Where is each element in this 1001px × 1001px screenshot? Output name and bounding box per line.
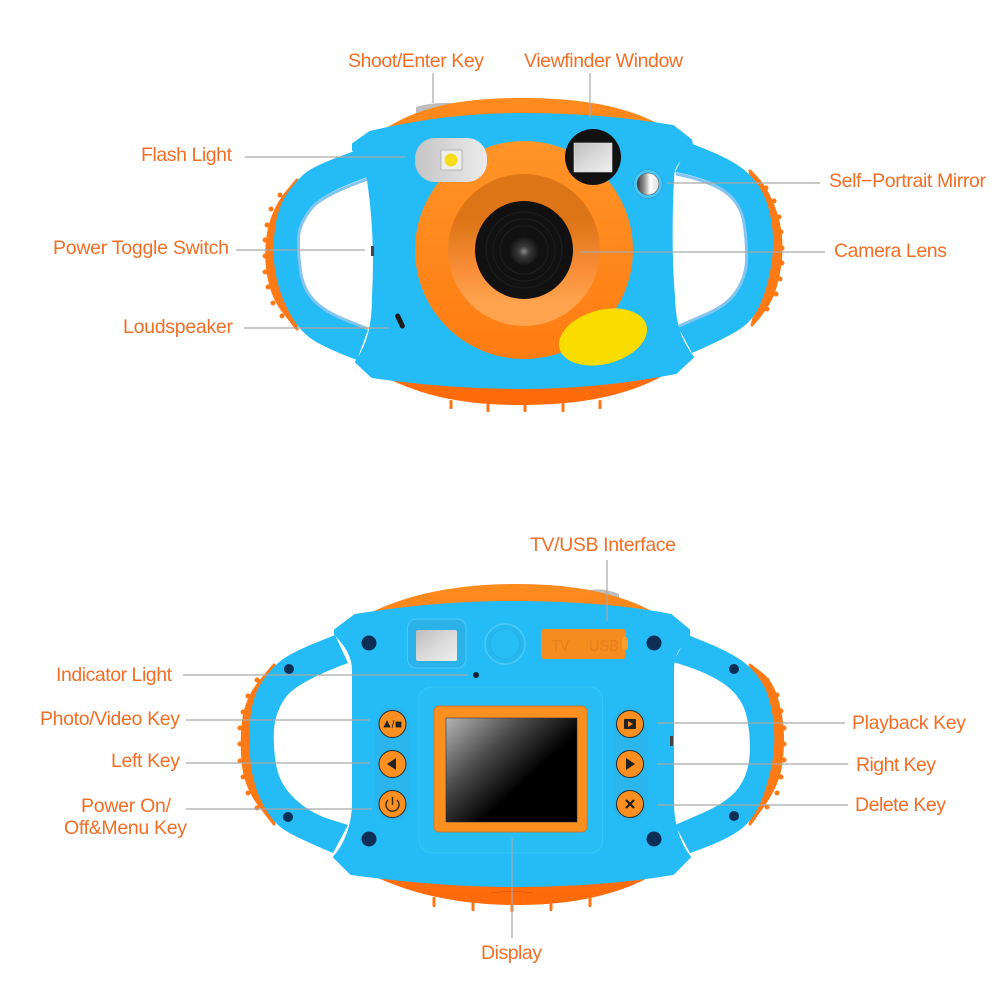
label: Self-Portrait Mirror: Self−Portrait Mirror: [829, 170, 986, 192]
label: TV/USB Interface: TV/USB Interface: [530, 534, 676, 556]
left handle orange grip: [262, 180, 297, 329]
label: Viewfinder Window: Viewfinder Window: [524, 50, 684, 72]
label: Delete Key: Delete Key: [855, 794, 946, 816]
right handle inner shading: [676, 174, 747, 326]
left handle: [274, 150, 368, 360]
label: Power On/Off & Menu Key: Power On/: [81, 795, 172, 817]
camera lens: [475, 201, 573, 299]
button recess left: [375, 707, 410, 821]
back viewfinder: [408, 619, 466, 668]
playback key: [616, 710, 644, 738]
main orange circle: [415, 141, 633, 359]
camera front view: [262, 98, 784, 412]
left handle back: [249, 635, 348, 853]
left key: [379, 750, 406, 778]
label: Power Toggle Switch: Power Toggle Switch: [53, 237, 229, 259]
flash light: [415, 138, 487, 182]
right handle orange grip: [750, 171, 784, 325]
shutter button back: [583, 589, 619, 604]
TV USB port cover: [541, 629, 628, 659]
display screen: [446, 718, 577, 822]
label: Playback Key: Playback Key: [852, 712, 966, 734]
viewfinder window: [565, 129, 621, 185]
left key group: [375, 707, 410, 821]
bottom seam mark: [491, 892, 533, 893]
orange shell back: [362, 584, 662, 912]
label: Photo/Video Key: Photo/Video Key: [40, 708, 180, 730]
label: Camera Lens: Camera Lens: [834, 240, 947, 262]
label: Flash Light: Flash Light: [141, 144, 233, 166]
right handle back: [673, 635, 774, 853]
power key: [379, 790, 406, 818]
yellow grip pad: [553, 299, 653, 375]
label: Left Key: Left Key: [111, 750, 180, 772]
right handle: [675, 143, 773, 353]
label: Loudspeaker: Loudspeaker: [123, 316, 234, 338]
label: Power On/Off & Menu Key: [64, 795, 187, 839]
photo video key: [379, 710, 406, 738]
right grip back: [750, 665, 786, 824]
side switch back: [670, 736, 673, 746]
loudspeaker slot: [394, 313, 406, 329]
orange shell: [380, 98, 670, 412]
right key group: [613, 707, 648, 821]
indicator light: [473, 672, 479, 678]
blue body back: [334, 602, 690, 886]
power toggle switch: [371, 246, 374, 256]
label: Right Key: Right Key: [856, 754, 936, 776]
shutter button top: [416, 103, 453, 118]
round button recess: [485, 624, 525, 664]
button recess right: [613, 707, 648, 821]
camera back view: [238, 584, 786, 912]
self portrait mirror: [634, 170, 662, 198]
leader lines: [183, 73, 848, 938]
blue body: [353, 114, 693, 388]
display frame: [434, 706, 587, 832]
display surround panel: [419, 687, 602, 853]
left handle inner shading: [298, 179, 368, 329]
label: Display: Display: [481, 942, 542, 964]
label: Indicator Light: Indicator Light: [56, 664, 173, 686]
label: Power On/Off & Menu Key: Off&Menu Key: [64, 817, 187, 839]
label: Shoot/Enter Key: Shoot/Enter Key: [348, 50, 484, 72]
TV USB port cover: USB: [589, 638, 619, 655]
bottom bumps: [450, 400, 602, 412]
left grip back: [238, 665, 274, 824]
bottom bumps back: [432, 897, 592, 912]
inner lens ring: [448, 174, 600, 326]
right key: [616, 750, 644, 778]
TV USB port cover: TV: [552, 638, 569, 655]
corner screw holes: [283, 636, 739, 846]
delete key: [616, 790, 644, 818]
